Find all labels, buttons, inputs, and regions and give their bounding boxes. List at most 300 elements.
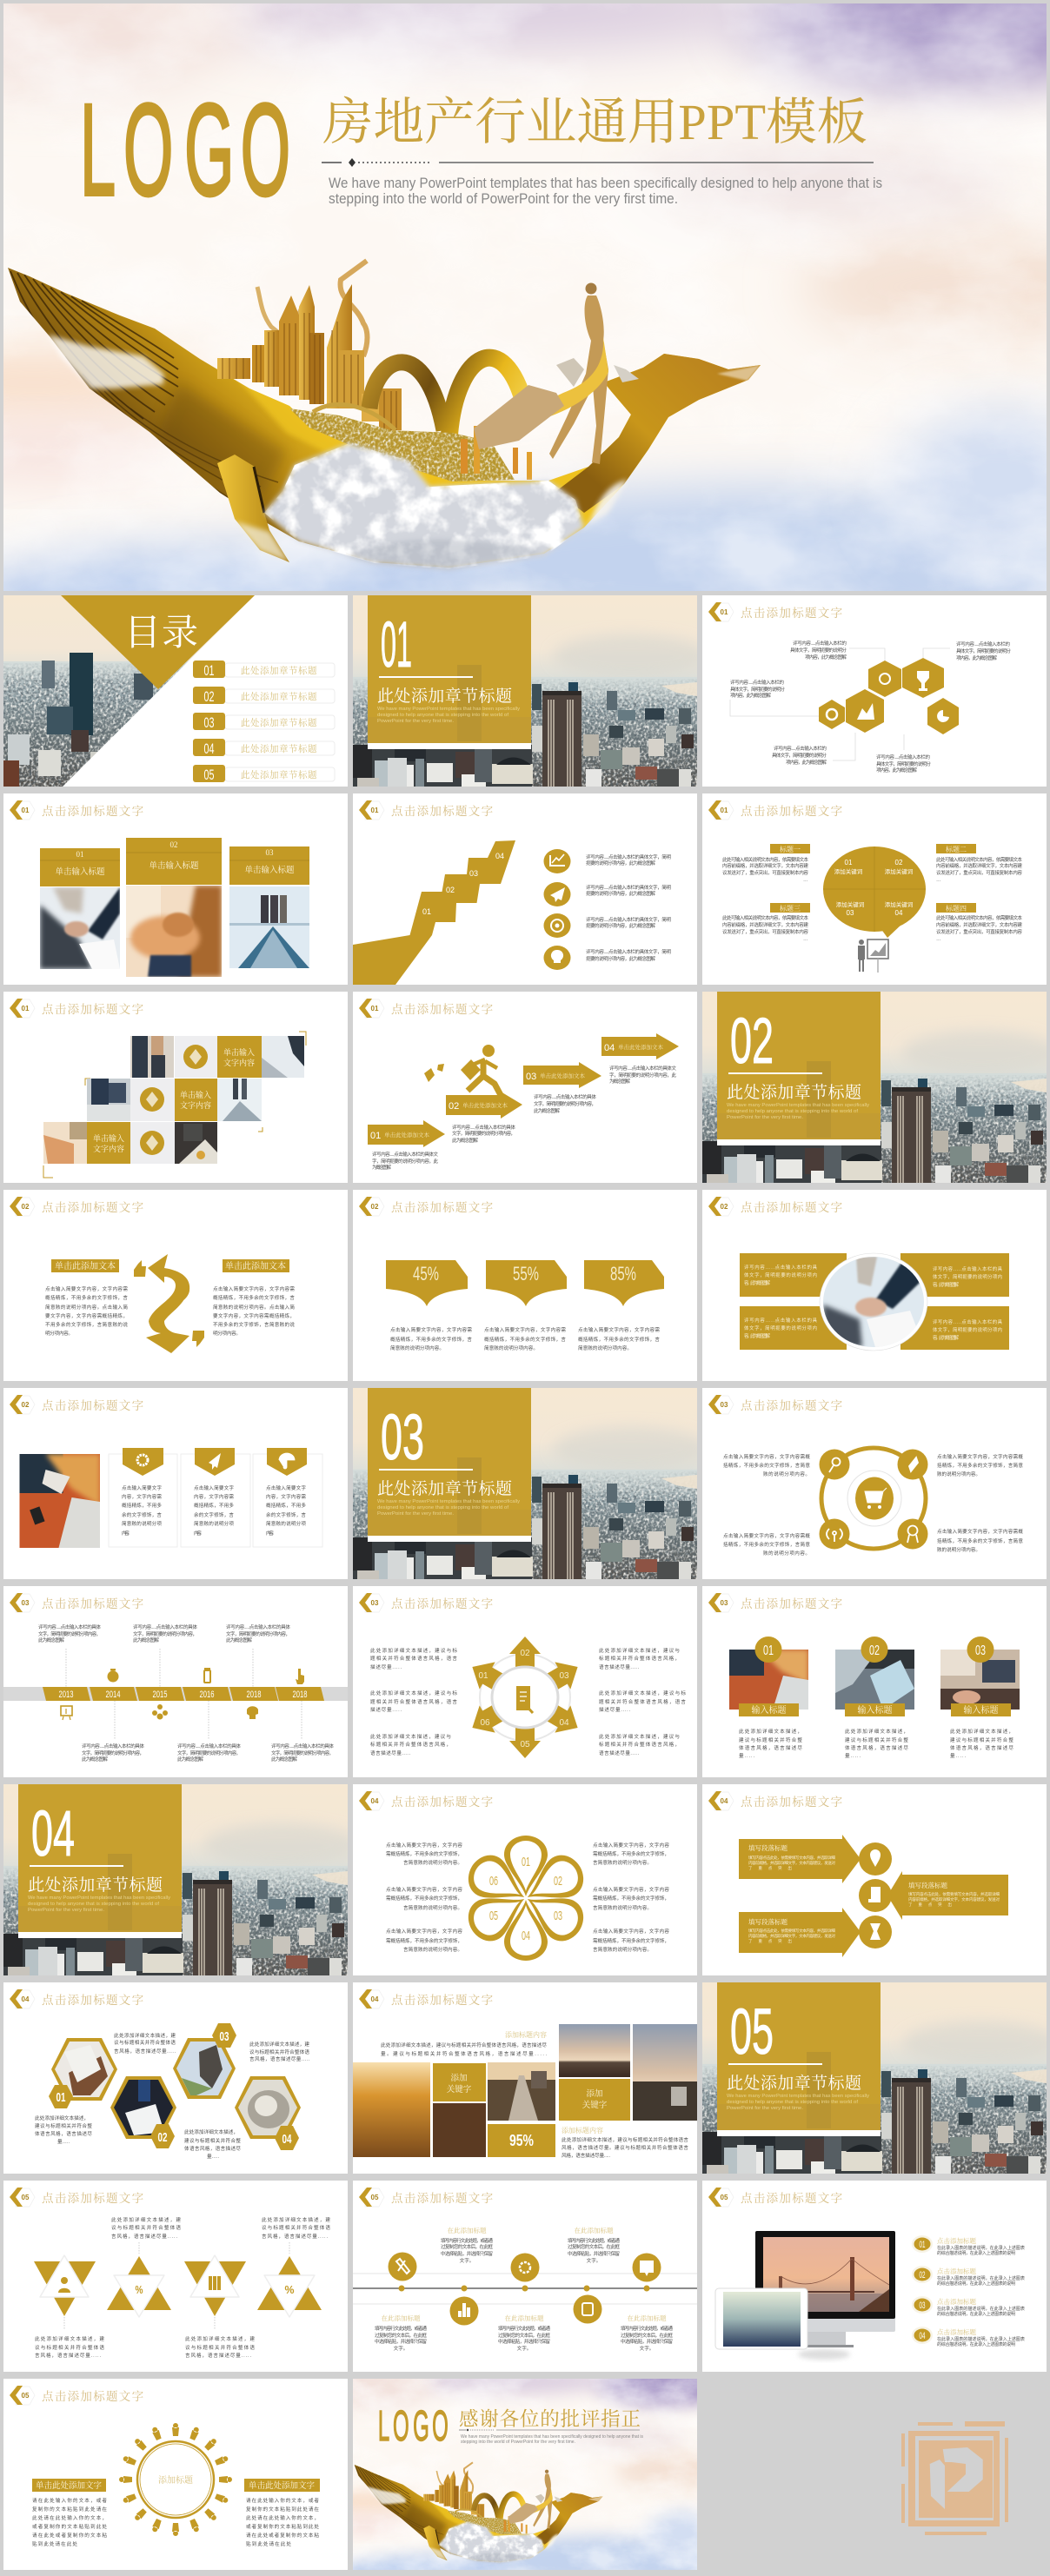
bottom text block: 风格，语言描述尽量..... (562, 2152, 610, 2159)
section description: PowerPoint for the very first time. (727, 1115, 803, 1120)
arrow captions: 评写内容.....点击输入本栏的具体文 (372, 1151, 438, 1158)
badge descriptions: 点击输入简要文字内容，文字内容需 (578, 1326, 660, 1333)
tab: left (51, 1259, 119, 1272)
panel: horizontal milestones slide (353, 2181, 697, 2372)
slide header (359, 800, 494, 820)
sunset clouds photo (353, 2062, 430, 2157)
ring descriptions: 括精炼，不用多余的文字修饰，言简意 (723, 1462, 810, 1469)
number hexagons: 02 (158, 2130, 167, 2145)
left description: 不用多余的文字修饰，言简意赅的说 (45, 1321, 128, 1328)
bottom text block: 风格，语言描述尽量。建议与标题相关并符合整体语言 (562, 2144, 688, 2151)
tab descriptions: … (803, 937, 808, 942)
milestone icons (396, 2259, 654, 2317)
circle icons (549, 854, 565, 963)
swirl arrows (134, 1254, 204, 1353)
milestone circles (388, 2253, 661, 2326)
item 4: 在此录入图表的描述说明，在此录入上述图表 (937, 2336, 1025, 2342)
panel: six arrows ring slide (353, 1586, 697, 1777)
panel: photo mosaic slide (3, 992, 348, 1183)
badge descriptions (390, 1326, 660, 1351)
slide header: 02 (371, 1203, 379, 1211)
section number: 04 (31, 1797, 75, 1869)
tablet mockup (715, 2288, 807, 2349)
item 2: 点击添加标题 (937, 2267, 976, 2275)
closing logo wordmark: G (413, 2403, 429, 2450)
corner icon circles (819, 1450, 928, 1549)
item 4: 的综合描述说明，在此录入上述图表的说明 (937, 2341, 1015, 2347)
stair numbers: 01 (422, 907, 431, 916)
right description (246, 2497, 319, 2547)
triangle descriptions: 此处添加详细文本描述，建 (185, 2335, 255, 2342)
right arrow bottom (739, 1908, 861, 1957)
slide header: 点击添加标题文字 (391, 1795, 494, 1809)
arrow captions: 文字，简明扼要的说明分项内容， (534, 1100, 596, 1107)
photo descriptions: 此处添加详细文本描述， (739, 1728, 802, 1735)
slide header (359, 999, 494, 1018)
card descriptions: 简意赅的说明分项 (266, 1520, 306, 1527)
tab descriptions: 内容前缀格，并选取详细文字，文本内容建 (722, 862, 808, 869)
tab descriptions: 此处可输入相关说明文本内容，依需要填文本 (722, 914, 808, 921)
arrow descriptions: 语言描述尽量..... (599, 1663, 639, 1670)
slide header: 点击添加标题文字 (42, 1597, 144, 1610)
bubble labels: 添加关键词 (834, 867, 862, 875)
timeline captions: 此为概念图解 (133, 1637, 159, 1643)
icon circles (544, 849, 570, 970)
item 4: 04 (920, 2331, 925, 2341)
cover subtitle (329, 175, 882, 207)
triangle group 4: % (285, 2283, 295, 2296)
tab descriptions: 议发送对了，重点突出，可直接复制本内容 (722, 928, 808, 935)
arrow captions: 文字，简明扼要的说明分项内容， (452, 1130, 515, 1137)
hexagon descriptions: 言风格，语言描述尽量..... (249, 2055, 309, 2062)
section description (727, 2094, 869, 2111)
contents item 4 (193, 739, 335, 757)
panel: interlocking arrows slide (702, 1784, 1047, 1975)
tab descriptions: 此处可输入相关说明文本内容，依需要填文本 (722, 856, 808, 863)
petal descriptions: 言简意赅的说明分项内容。 (403, 1904, 462, 1911)
year tabs: 2018 (247, 1690, 261, 1700)
tab descriptions (722, 856, 1022, 942)
tab: left (32, 2479, 106, 2492)
contents item 3 (193, 713, 335, 731)
stair captions: 评写内容.....点击输入本栏的具体文字，简明 (586, 948, 671, 955)
panel: section 05 slide (702, 1982, 1050, 2174)
panel: section 01 slide: 01 (381, 608, 412, 681)
slide header (359, 1791, 494, 1810)
item 1: 01 (920, 2240, 925, 2250)
left description: 要文字内容，文字内容需概括精炼， (45, 1312, 128, 1319)
petal numbers (489, 1855, 562, 1943)
stat tile (488, 2124, 555, 2157)
section number: 02 (730, 1005, 774, 1077)
hexagon descriptions: 体语言风格，语言描述尽 (35, 2130, 92, 2137)
slide header: 点击添加标题文字 (391, 2191, 494, 2205)
petal descriptions: 需概括精炼，不用多余的文字修饰， (386, 1937, 462, 1944)
timeline captions: 评写内容.....点击输入本栏的具体 (133, 1623, 197, 1630)
milestone titles and text: 文字。 (394, 2345, 408, 2352)
arrow descriptions: 语言描述尽量..... (370, 1749, 410, 1756)
item 3 (912, 2296, 1025, 2317)
hexagon icons (827, 671, 949, 722)
closing subtitle: stepping into the world of PowerPoint for the very first time. (461, 2440, 575, 2445)
photo descriptions: 量..... (739, 1753, 754, 1759)
arrow captions: 字，简明扼要的说明分项内容，此 (372, 1158, 438, 1165)
hexagon descriptions: 议与标题相关并符合整体语 (249, 2048, 309, 2055)
keyword tile 1: 关键字 (447, 2084, 472, 2095)
top text block: 添加标题内容 (505, 2030, 547, 2039)
mosaic row 1 (130, 1036, 304, 1078)
milestone titles and text: 文字。 (640, 2345, 654, 2352)
right arrow bottom: 填写段落标题 (748, 1917, 788, 1926)
ring descriptions: 点击输入简要文字内容，文字内容需概 (723, 1453, 810, 1460)
slide header (359, 2188, 494, 2207)
slide header: 点击添加标题文字 (391, 1002, 494, 1016)
label tabs: 标题二 (946, 845, 967, 853)
ring descriptions: 赅的说明分项内容。 (763, 1550, 810, 1557)
slide header: 03 (22, 1599, 30, 1607)
panel: hexagon icons slide (702, 595, 1047, 787)
bubble labels: 04 (895, 909, 903, 917)
box captions: 体文字，简明扼要的说明分项内 (933, 1273, 1002, 1280)
item 1 (912, 2235, 1025, 2256)
mosaic row 3: 单击输入 (93, 1133, 124, 1143)
gold ring (821, 1448, 926, 1549)
box captions (744, 1264, 1003, 1341)
right description: 请在此处输入你的文本，或者 (246, 2497, 319, 2504)
hexagon captions (730, 640, 1011, 773)
slide header: 02 (22, 1401, 30, 1409)
panel: staircase slide (353, 793, 697, 985)
box captions: 评写内容.....点击输入本栏的具 (933, 1318, 1003, 1325)
mosaic row 2: 文字内容 (180, 1100, 211, 1110)
bottom text block: 添加标题内容 (562, 2126, 603, 2134)
photo descriptions: 建议与标题相关并符合整 (845, 1736, 908, 1743)
panel: ascending arrows slide (353, 992, 697, 1183)
tab: right (223, 1259, 289, 1272)
arrow 04 (601, 1033, 679, 1059)
panel: three feature cards slide (3, 1388, 348, 1579)
milestone titles and text: 中选择粘贴，并选择只保留 (498, 2338, 550, 2345)
triangle descriptions: 言风格，语言描述尽量..... (35, 2352, 101, 2359)
badge descriptions: 简意赅的说明分项内容。 (390, 1344, 444, 1351)
ring descriptions: 赅的说明分项内容。 (937, 1471, 980, 1477)
left arrow middle: 填写内容点击此处，依需要填写文本内容，并选取详细 (908, 1891, 1000, 1897)
section description: designed to help anyone that is stepping into the world of (377, 713, 508, 718)
axis dots (398, 2286, 650, 2291)
closing subtitle: We have many PowerPoint templates that has been specifically designed to help anyone that is (461, 2434, 643, 2440)
petal numbers: 06 (489, 1874, 498, 1889)
hexagon captions: 项内容，此为概念图解 (956, 654, 997, 661)
milestone titles and text: 在此添加标题 (447, 2226, 487, 2234)
arrow captions: 此为概念图解 (452, 1137, 478, 1144)
arrow descriptions: 题相关并符合整体语言风格，语言 (370, 1698, 457, 1705)
white diagonal panel (63, 595, 348, 787)
mosaic row 2 (87, 1079, 262, 1121)
slide header (10, 2188, 144, 2207)
milestone titles and text: 在此添加标题 (574, 2226, 614, 2234)
card 3 (229, 846, 309, 968)
left arrow middle: 了重点突出 (908, 1902, 952, 1908)
right description: 请在此处或者复制你的文本粘 (246, 2532, 319, 2539)
timeline captions: 评写内容.....点击输入本栏的具体 (82, 1743, 144, 1749)
right description: 概括精炼，不用多余的文字修饰，言 (213, 1294, 295, 1301)
tab descriptions: 议发送对了，重点突出，可直接复制本内容 (722, 869, 808, 876)
timeline captions: 评写内容.....点击输入本栏的具体 (38, 1623, 101, 1630)
arrow descriptions: 描述尽量..... (370, 1706, 402, 1713)
arrow descriptions: 标题相关并符合整体语言风格， (599, 1741, 680, 1748)
panel: section 03 slide (353, 1388, 709, 1579)
box captions: 评写内容.....点击输入本栏的具 (744, 1264, 818, 1271)
slide header (10, 2386, 144, 2405)
ring descriptions: 括精炼，不用多余的文字修饰，言简意 (937, 1537, 1023, 1544)
slide header: 点击添加标题文字 (391, 1993, 494, 2007)
left description: 此处请在此处输入你的文本， (32, 2514, 107, 2521)
arrow captions: 为概念图解 (609, 1078, 630, 1085)
panel: section 04 slide (3, 1784, 360, 1975)
panel: triangles slide (3, 2181, 348, 2372)
slide header (708, 602, 843, 621)
left description: 概括精炼，不用多余的文字修饰，言 (45, 1294, 128, 1301)
arrow 02: 02 (449, 1101, 459, 1112)
tab descriptions: 此处可输入相关说明文本内容，依需要填文本 (936, 914, 1022, 921)
keyword tile 2 (559, 2079, 630, 2121)
hexagon captions: 评写内容.....点击输入本栏的 (793, 640, 847, 647)
right description: 明分项内容。 (213, 1330, 241, 1337)
title divider line with diamond (322, 158, 874, 167)
corner icons (827, 1457, 918, 1543)
logo wordmark: L (80, 77, 116, 223)
petal descriptions: 需概括精炼，不用多余的文字修饰， (593, 1937, 669, 1944)
card descriptions: 概括精炼，不用多 (194, 1502, 234, 1509)
arrow descriptions: 此处添加详细文本描述，建议与 (370, 1733, 451, 1740)
petal descriptions: 言简意赅的说明分项内容。 (403, 1859, 462, 1866)
timeline captions: 文字，简明扼要的说明分项内容， (133, 1630, 197, 1637)
item 1: 在此录入图表的描述说明，在此录入上述图表 (937, 2245, 1025, 2251)
tab descriptions: 议发送对了，重点突出，可直接复制本内容 (936, 869, 1022, 876)
petal numbers: 04 (522, 1929, 530, 1943)
card descriptions: 简意赅的说明分项 (194, 1520, 234, 1527)
photo descriptions: 体语言风格，语言描述尽 (739, 1744, 802, 1751)
timeline captions: 此为概念图解 (226, 1637, 252, 1643)
section description: PowerPoint for the very first time. (377, 719, 454, 724)
bubble labels: 01 (845, 859, 853, 866)
contents item 1: 01 (203, 662, 214, 679)
year tabs: 2014 (106, 1690, 120, 1700)
petal descriptions: 言简意赅的说明分项内容。 (593, 1859, 652, 1866)
slide header: 04 (22, 1995, 30, 2003)
closing logo wordmark: O (432, 2403, 449, 2450)
card 1: 01 (76, 850, 83, 859)
mosaic row 2: 单击输入 (180, 1090, 211, 1099)
triangle descriptions: 议与标题相关并符合整体语 (185, 2344, 255, 2351)
slide header: 05 (371, 2194, 379, 2201)
arrow captions: 字，简明扼要的说明分项内容，此 (609, 1072, 676, 1079)
card descriptions: 概括精炼，不用多 (122, 1502, 162, 1509)
cover subtitle: stepping into the world of PowerPoint for the very first time. (329, 190, 678, 207)
left description (45, 1285, 128, 1337)
petal descriptions: 点击输入简要文字内容，文字内容 (386, 1842, 462, 1849)
photo column 1 (729, 1637, 808, 1716)
right arrow top: 了重点突出 (748, 1865, 792, 1871)
keyword tile 1: 添加 (450, 2073, 468, 2083)
ring descriptions: 赅的说明分项内容。 (937, 1546, 980, 1553)
tab descriptions: … (936, 878, 941, 883)
keyword tile 2: 关键字 (582, 2100, 608, 2110)
contents item 5 (193, 765, 335, 783)
arrow 03: 03 (526, 1072, 536, 1082)
slide header: 04 (371, 1995, 379, 2003)
hexagon captions: 项内容，此为概念图解 (805, 654, 847, 661)
slide header (359, 1593, 494, 1612)
slide header (10, 1197, 144, 1216)
timeline captions: 文字，简明扼要的说明分项内容， (82, 1749, 144, 1756)
hexagon captions: 具体文字，简明扼要的说明分 (790, 647, 847, 654)
arrow descriptions: 题相关并符合整体语言风格，语言 (599, 1698, 686, 1705)
hexagon captions: 项内容，此为概念图解 (786, 759, 827, 766)
slide header: 02 (22, 1203, 30, 1211)
top text block (381, 2030, 547, 2057)
card 3: 单击输入标题 (244, 865, 295, 875)
logo wordmark: G (184, 77, 234, 223)
hexagon photo 3 (173, 2038, 236, 2099)
dark forest photo (433, 2103, 486, 2157)
tab: right: 单击此添加文本 (225, 1260, 286, 1271)
logo wordmark: O (241, 77, 290, 223)
icon: presenter with chart (858, 939, 888, 973)
photo column 3: 输入标题 (963, 1704, 998, 1716)
panel: timeline slide (3, 1586, 348, 1777)
hexagon descriptions: 言风格，语言描述尽量..... (114, 2048, 176, 2055)
slide header: 点击添加标题文字 (391, 804, 494, 818)
slide header: 点击添加标题文字 (741, 1200, 843, 1214)
tab descriptions: 内容前缀格，并选取详细文字，文本内容建 (722, 921, 808, 928)
arrow 03 (523, 1062, 601, 1088)
arrow descriptions: 此处添加详细文本描述，建议与 (599, 1733, 680, 1740)
year tabs: 2018 (292, 1690, 308, 1700)
right description: 贴到此处请在此处 (246, 2540, 291, 2547)
left description: 明分项内容。 (45, 1330, 73, 1337)
section description: PowerPoint for the very first time. (377, 1511, 454, 1517)
hexagon descriptions: 量..... (57, 2139, 70, 2145)
number hexagons (49, 2023, 299, 2150)
card descriptions: 内容，文字内容需 (194, 1493, 234, 1500)
timeline captions: 文字，简明扼要的说明分项内容， (271, 1749, 334, 1756)
hexagon descriptions: 量..... (207, 2154, 219, 2160)
photo descriptions: 量..... (950, 1753, 966, 1759)
section description: We have many PowerPoint templates that has been specifically (377, 1499, 520, 1504)
badge 85%: 85% (610, 1263, 636, 1285)
bubble labels: 添加关键词 (885, 867, 913, 875)
slide header (10, 999, 144, 1018)
contents item 1 (193, 661, 335, 679)
slide header (708, 800, 843, 820)
contents item 2: 02 (203, 688, 214, 705)
six petal flower (461, 1836, 591, 1961)
label tabs: 标题一 (780, 845, 801, 853)
bottom text block: 此处添加详细文本描述，建议与标题相关并符合整体语言 (562, 2136, 688, 2143)
timeline captions: 评写内容.....点击输入本栏的具体 (177, 1743, 241, 1749)
ring descriptions: 括精炼，不用多余的文字修饰，言简意 (723, 1541, 810, 1548)
section description: PowerPoint for the very first time. (727, 2106, 803, 2111)
slide header: 01 (371, 1005, 379, 1012)
right arrow top: 填写段落标题 (748, 1843, 788, 1852)
keyword tile 1 (433, 2063, 486, 2101)
milestone titles and text: 文字。 (587, 2257, 601, 2264)
panel: handshake circle slide (702, 1190, 1047, 1381)
label tabs (770, 844, 976, 913)
card 2: 单击输入标题 (149, 860, 199, 871)
contents item 2 (193, 687, 335, 705)
slide header: 05 (721, 2194, 728, 2201)
triangle group 4 (257, 2256, 322, 2317)
tab descriptions: 内容前缀格，并选取详细文字，文本内容建 (936, 921, 1022, 928)
right description: 不用多余的文字修饰，言简意赅的说 (213, 1321, 295, 1328)
petal descriptions: 点击输入简要文字内容，文字内容 (386, 1886, 462, 1893)
right description: 或者复制你的文本粘贴到此处 (246, 2523, 319, 2530)
tab descriptions: 内容前缀格，并选取详细文字，文本内容建 (936, 862, 1022, 869)
tab descriptions: … (803, 878, 808, 883)
item 4: 点击添加标题 (937, 2327, 976, 2336)
photo descriptions: 此处添加详细文本描述， (845, 1728, 908, 1735)
panel: three photo cards slide (3, 793, 348, 985)
section description: PowerPoint for the very first time. (28, 1908, 104, 1913)
milestone titles and text: 填写内容行文此处题，或者通 (621, 2325, 673, 2332)
milestone titles and text: 文字。 (517, 2345, 531, 2352)
photo column 1: 01 (763, 1643, 774, 1658)
timeline captions: 此为概念图解 (82, 1756, 108, 1763)
gold staircase (353, 840, 515, 985)
timeline captions: 此为概念图解 (38, 1637, 64, 1643)
arrow descriptions: 题相关并符合整体语言风格，语言 (370, 1655, 457, 1662)
card descriptions: 余的文字修饰，言 (266, 1511, 306, 1518)
slide header: 02 (721, 1203, 728, 1211)
panel: photo grid slide (353, 1982, 697, 2174)
panel: flower petals slide (353, 1784, 697, 1975)
left arrow middle: 内容前缀格，并选取详细文字，文本内容建议，发送对 (908, 1896, 1000, 1902)
arrow 01: 01 (370, 1131, 381, 1141)
stair numbers: 04 (495, 852, 504, 860)
tab: left: 单击此添加文本 (55, 1260, 116, 1271)
bottom text block (562, 2126, 688, 2159)
road photo (488, 2062, 555, 2121)
slide header: 点击添加标题文字 (42, 2191, 144, 2205)
slide header: 04 (721, 1797, 728, 1805)
heading: contents: 目录 (124, 614, 199, 654)
hexagon descriptions: 此处添加详细文本描述，建 (249, 2041, 309, 2048)
contents item 4: 04 (203, 740, 214, 757)
timeline band (3, 1687, 348, 1701)
ring descriptions: 赅的说明分项内容。 (763, 1471, 810, 1477)
petal descriptions: 言简意赅的说明分项内容。 (403, 1946, 462, 1953)
section description: We have many PowerPoint templates that has been specifically (28, 1895, 170, 1901)
year tabs: 2015 (153, 1690, 167, 1700)
petal descriptions: 点击输入简要文字内容，文字内容 (386, 1928, 462, 1935)
closing background scene (300, 2358, 748, 2576)
keyword tile 2: 添加 (586, 2088, 603, 2099)
label tabs: 标题四 (946, 904, 967, 913)
ring title: 添加标题 (158, 2474, 193, 2486)
petal numbers: 02 (554, 1874, 562, 1889)
petal descriptions: 需概括精炼，不用多余的文字修饰， (593, 1895, 669, 1902)
slide header: 点击添加标题文字 (741, 1597, 843, 1610)
mosaic row 3: 文字内容 (93, 1144, 124, 1153)
closing logo wordmark: L (378, 2403, 389, 2450)
contents item 5: 此处添加章节标题 (241, 769, 317, 780)
panel: sun ring slide (3, 2379, 348, 2570)
left description: 请在此处或者复制你的文本粘 (32, 2532, 107, 2539)
badge descriptions: 点击输入简要文字内容，文字内容需 (484, 1326, 566, 1333)
contents item 1: 此处添加章节标题 (241, 665, 317, 676)
